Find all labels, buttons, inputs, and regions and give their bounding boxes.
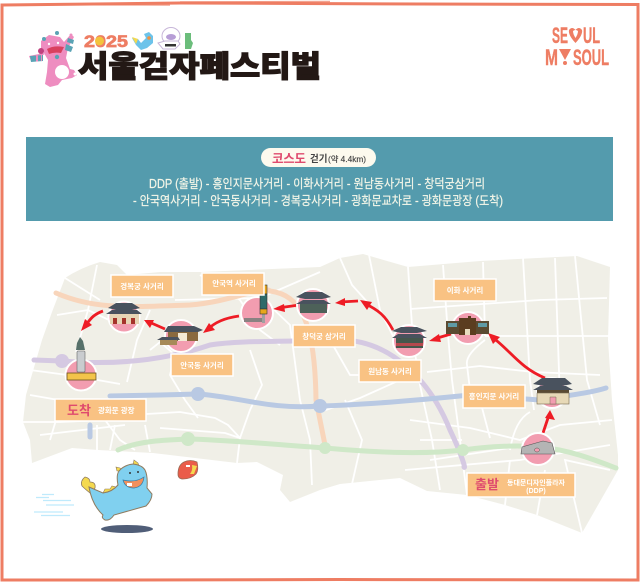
route arrows [81, 298, 555, 433]
festival logo [29, 28, 321, 87]
stop: Wonnam-dong [392, 325, 427, 357]
route text [133, 177, 503, 208]
subway line: peach [56, 290, 326, 450]
label: Changdeokgung: 창덕궁 삼거리 [302, 331, 346, 341]
map base [23, 254, 618, 533]
icon: palace [296, 292, 331, 313]
label: start: 동대문디자인플라자 [507, 478, 566, 487]
route text: - 안국역사거리 - 안국동사거리 - 경복궁사거리 - 광화문교차로 - 광화문광장 (도착) [133, 194, 503, 208]
label: Changdeokgung [293, 325, 355, 347]
year 2025: 2025 [84, 33, 128, 51]
stop: Heunginjimun [533, 378, 573, 408]
course pill: (약 4.4km) [328, 154, 366, 164]
label: destination: 도착 [67, 403, 91, 418]
label: Wonnam-dong [359, 360, 421, 382]
label: Ewha [434, 279, 496, 301]
Seoul My Soul logo: SE [552, 23, 568, 48]
label: Anguk station [202, 273, 264, 295]
icon: DDP building [521, 441, 555, 454]
label: Gyeongbokgung [111, 275, 173, 297]
icon: historic building [446, 316, 489, 335]
label: Heunginjimun [463, 385, 525, 408]
icon: hanok [157, 326, 203, 345]
label: Heunginjimun: 흥인지문 사거리 [469, 391, 519, 401]
stop: Ewha [446, 312, 489, 344]
route text: DDP (출발) - 흥인지문사거리 - 이화사거리 - 원남동사거리 - 창덕궁삼거리 [149, 177, 485, 191]
stop: Changdeokgung [296, 289, 331, 321]
Seoul My Soul logo: SOUL [573, 45, 609, 70]
icon: station sign [244, 285, 267, 323]
icon: gate [533, 378, 573, 404]
stop: Gwanghwamun (destination) [66, 337, 96, 390]
label: destination [55, 399, 146, 421]
Seoul My Soul logo: UL [583, 23, 600, 48]
stop: DDP (start) [521, 433, 555, 465]
title: 서울걷자페스티벌 [78, 42, 321, 86]
roads [23, 255, 612, 533]
course pill [261, 148, 376, 167]
panel: course info [26, 137, 613, 221]
Seoul My Soul logo: M [545, 45, 558, 70]
subway line: blue [110, 388, 606, 407]
icon: palace gate [106, 303, 142, 324]
course pill: 걷기 [310, 153, 327, 165]
dinosaur foot and spines [81, 477, 95, 493]
label: Gyeongbokgung: 경복궁 사거리 [120, 281, 164, 291]
icon: palace [392, 327, 427, 348]
label: Anguk station: 안국역 사거리 [212, 278, 256, 288]
label: start [467, 473, 575, 497]
label: destination: 광화문 광장 [98, 405, 135, 415]
label: Wonnam-dong: 원남동 사거리 [368, 366, 412, 376]
stop: Gyeongbokgung [106, 302, 142, 332]
stop: Anguk-dong [157, 320, 203, 352]
label: Anguk-dong [171, 354, 233, 376]
mascot: pink monster [29, 31, 77, 87]
speed lines [34, 494, 74, 516]
course pill: 코스도 [272, 152, 306, 166]
icon: statue [67, 337, 96, 380]
label: Anguk-dong: 안국동 사거리 [180, 360, 224, 370]
subway line: purple [34, 340, 464, 467]
small mascots [132, 28, 193, 50]
label: start: 출발 [475, 477, 499, 492]
stop: Anguk station [241, 285, 273, 329]
label: Ewha: 이화 사거리 [447, 285, 483, 295]
mascot: red bird [178, 460, 198, 479]
subway line: green [118, 439, 616, 468]
label: start: (DDP) [526, 488, 546, 495]
mascot: blue dinosaur [34, 460, 153, 533]
Seoul My Soul logo [545, 23, 609, 70]
